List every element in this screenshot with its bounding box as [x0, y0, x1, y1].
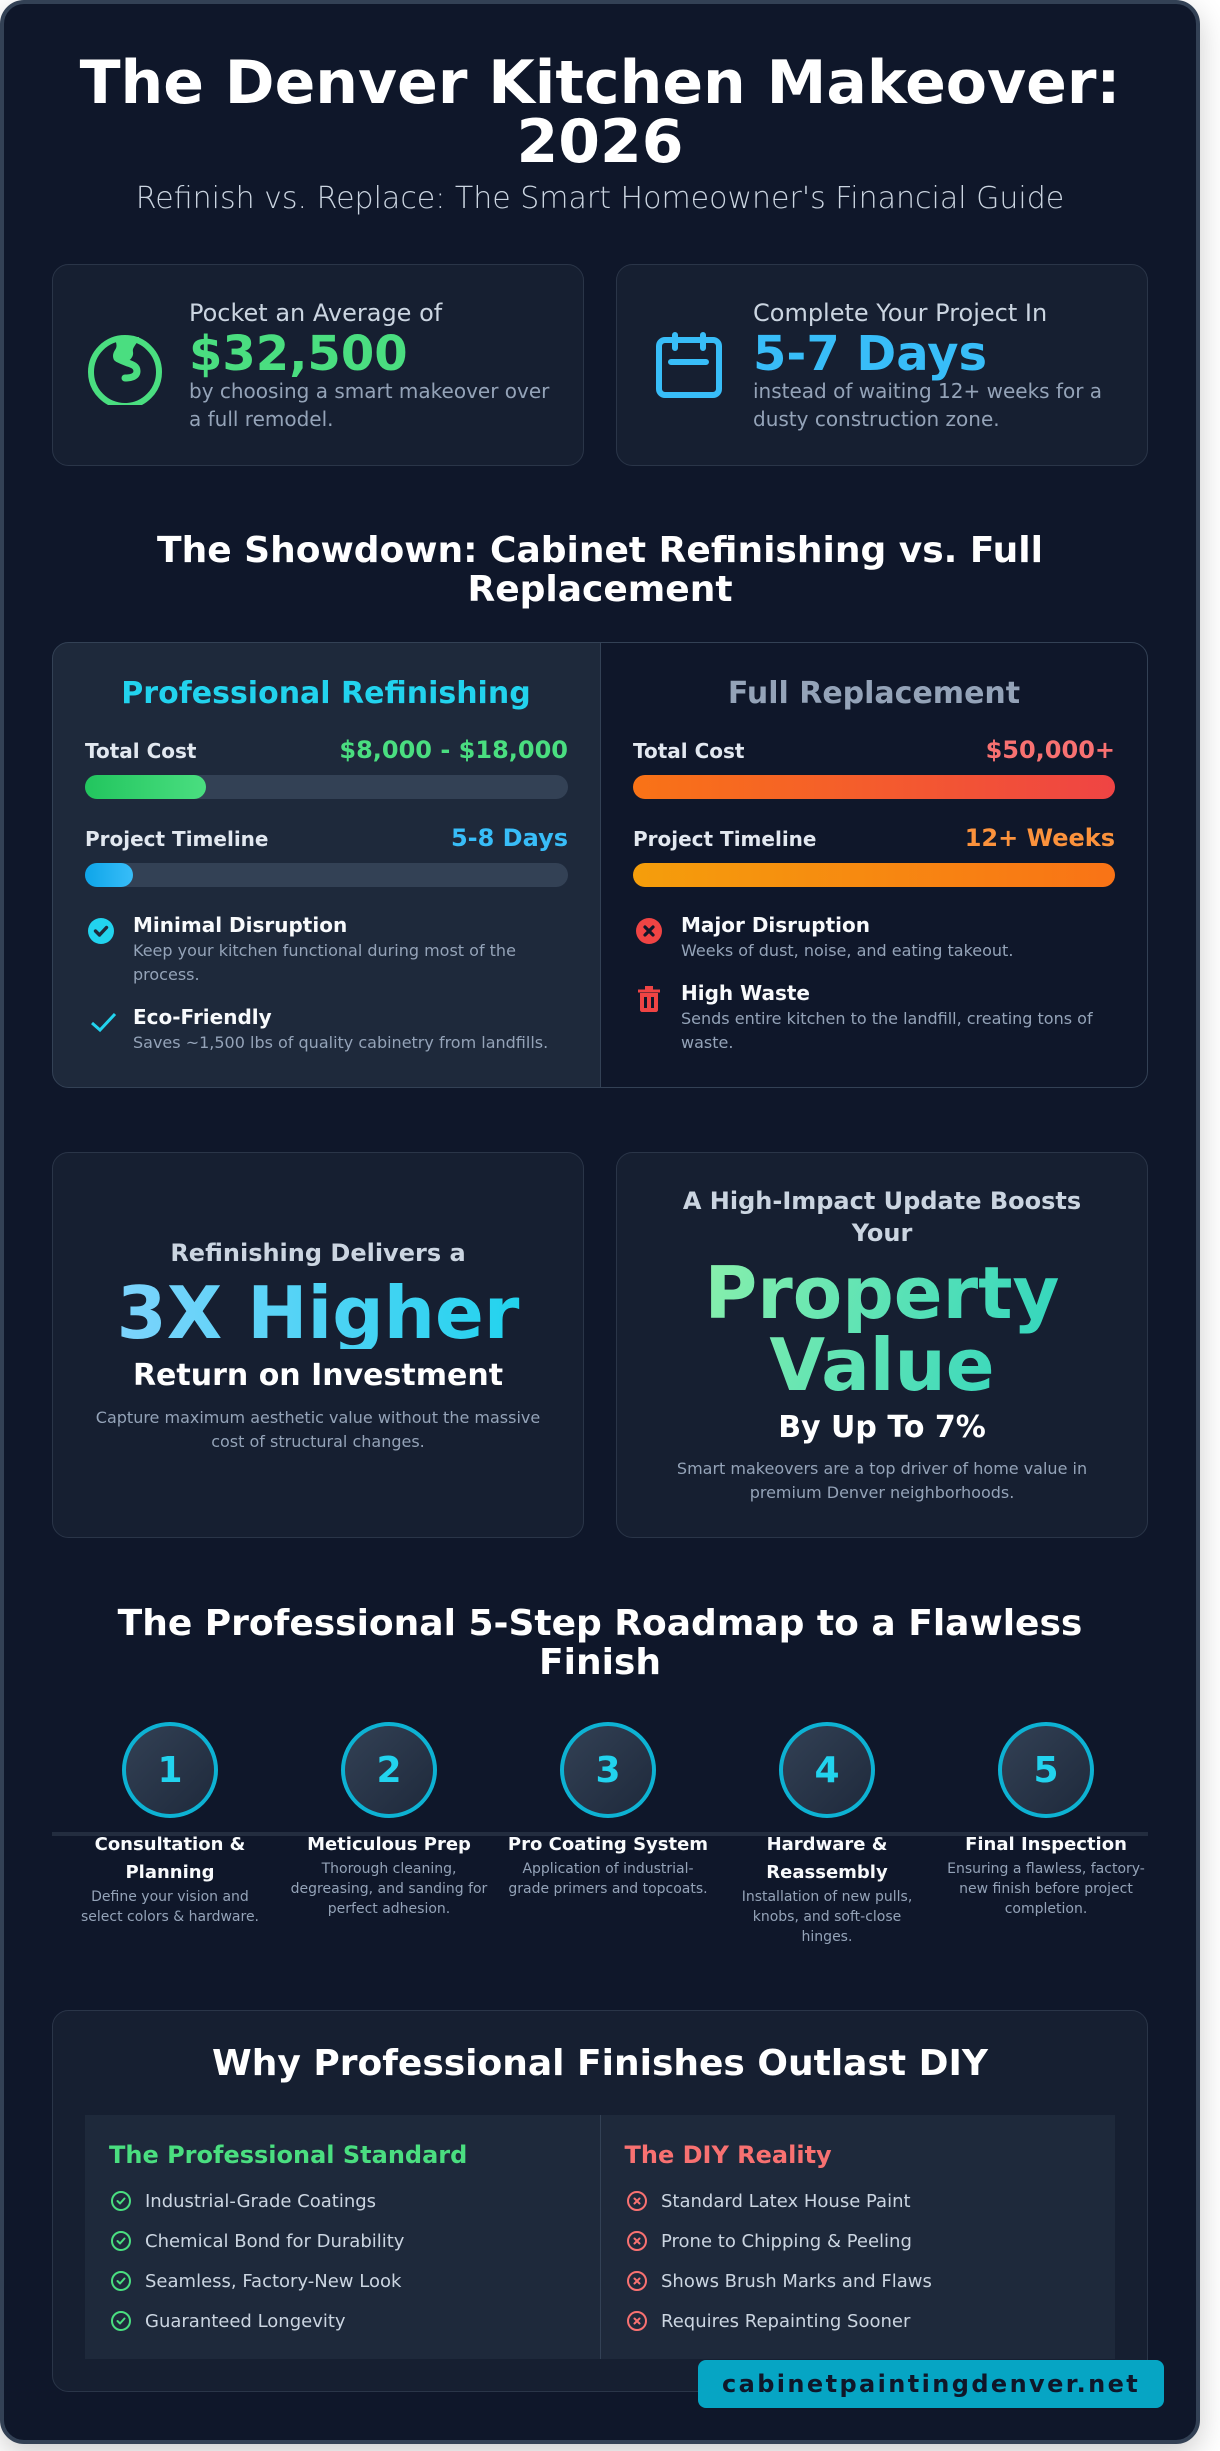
panel: property value: premium Denver neighborhoods.	[750, 1483, 1014, 1502]
column: professional refinishing: Total Cost	[85, 739, 197, 763]
column: DIY reality: The DIY Reality	[624, 2141, 832, 2169]
subtitle: Refinish vs. Replace: The Smart Homeowner's Financial Guide	[136, 181, 1064, 216]
column: professional refinishing: Saves ~1,500 lbs of quality cabinetry from landfills.	[133, 1033, 548, 1052]
step 2	[291, 1724, 488, 1917]
panel: time stat: 5-7 Days	[753, 326, 987, 382]
bar: replacement cost	[633, 775, 1115, 799]
icon list: checks	[112, 2192, 130, 2330]
heading: showdown	[157, 530, 1043, 610]
column: full replacement: waste.	[681, 1033, 733, 1052]
step 3: 3	[595, 1750, 621, 1791]
step 3: grade primers and topcoats.	[508, 1881, 708, 1897]
column: full replacement: $50,000+	[986, 736, 1115, 764]
column: professional refinishing: Project Timeline	[85, 827, 268, 851]
step 5: completion.	[1005, 1901, 1087, 1917]
panel: time stat	[616, 264, 1148, 466]
panel: time stat: dusty construction zone.	[753, 407, 1000, 431]
panel: pro vs DIY	[52, 2010, 1148, 2392]
heading: roadmap: Finish	[539, 1642, 661, 1683]
panel: ROI	[52, 1152, 584, 1538]
step 4: hinges.	[802, 1929, 852, 1945]
step 2: Meticulous Prep	[307, 1834, 471, 1855]
panel: savings stat	[52, 264, 584, 466]
icon: check badge	[88, 918, 114, 944]
step 2: perfect adhesion.	[328, 1901, 450, 1917]
panel: property value: Smart makeovers are a top driver of home value in	[677, 1459, 1087, 1478]
column: DIY reality	[624, 2141, 932, 2332]
step 3: Application of industrial-	[522, 1861, 694, 1877]
column: professional refinishing: process.	[133, 965, 200, 984]
icon: trash	[638, 986, 660, 1012]
panel: savings stat: $32,500	[189, 326, 408, 382]
step 1: Define your vision and	[91, 1889, 249, 1905]
step 5: Final Inspection	[965, 1834, 1127, 1855]
step 3	[508, 1724, 708, 1897]
step 1: 1	[157, 1750, 183, 1791]
icon: dollar coin	[91, 337, 159, 406]
title: The Denver Kitchen Makeover:	[80, 48, 1120, 118]
icon list: crosses	[628, 2192, 646, 2330]
column: professional standard: Industrial-Grade Coatings	[145, 2191, 376, 2212]
panel: ROI: Capture maximum aesthetic value without the massive	[96, 1408, 540, 1427]
step 1: Planning	[125, 1862, 215, 1883]
title: 2026	[516, 107, 684, 177]
icon: x badge	[636, 918, 662, 944]
step 5: 5	[1033, 1750, 1059, 1791]
panel: property value: Your	[851, 1219, 912, 1247]
bar: refinishing timeline	[85, 863, 568, 887]
panel: savings stat: by choosing a smart makeover over	[189, 379, 550, 403]
icon: check mark	[92, 1014, 115, 1030]
step 2: 2	[376, 1750, 402, 1791]
column: professional refinishing: Keep your kitchen functional during most of the	[133, 941, 516, 960]
column: professional standard: Guaranteed Longevity	[145, 2311, 346, 2332]
heading: showdown: The Showdown: Cabinet Refinishing vs. Full	[157, 530, 1043, 571]
step 1: select colors & hardware.	[81, 1909, 259, 1925]
roadmap	[52, 1724, 1148, 1945]
step 1	[81, 1724, 259, 1925]
column: professional refinishing: Minimal Disruption	[133, 913, 347, 937]
step 4: 4	[814, 1750, 840, 1791]
column: professional refinishing: $8,000 - $18,000	[339, 736, 568, 764]
panel: savings stat: a full remodel.	[189, 407, 334, 431]
column: professional refinishing	[85, 676, 568, 1052]
badge: website	[698, 2360, 1164, 2408]
column: full replacement	[633, 676, 1115, 1052]
icon: calendar	[659, 335, 719, 395]
step 5: new finish before project	[959, 1881, 1133, 1897]
column: professional refinishing: Professional Refinishing	[121, 676, 531, 711]
heading: showdown: Replacement	[467, 569, 733, 610]
bar: refinishing cost	[85, 775, 568, 799]
step 2: degreasing, and sanding for	[291, 1881, 488, 1897]
column: DIY reality: Requires Repainting Sooner	[661, 2311, 911, 2332]
column: full replacement: Total Cost	[633, 739, 745, 763]
step 3: Pro Coating System	[508, 1834, 708, 1855]
panel: property value	[616, 1152, 1148, 1538]
big text: property value: Value	[769, 1323, 995, 1407]
title	[80, 48, 1120, 177]
column: professional standard: Chemical Bond for Durability	[145, 2231, 405, 2252]
column: full replacement: Weeks of dust, noise, and eating takeout.	[681, 941, 1013, 960]
panel: comparison	[52, 642, 1148, 1088]
column: professional standard	[109, 2141, 467, 2332]
column: professional standard: Seamless, Factory-New Look	[145, 2271, 402, 2292]
column: full replacement: High Waste	[681, 981, 810, 1005]
column: professional standard: The Professional Standard	[109, 2141, 467, 2169]
big text: property value	[705, 1251, 1059, 1407]
step 4: Reassembly	[766, 1862, 888, 1883]
panel: ROI: Return on Investment	[133, 1358, 503, 1393]
step 4	[742, 1724, 912, 1945]
heading: roadmap: The Professional 5-Step Roadmap to a Flawless	[118, 1603, 1082, 1644]
big number: 3X higher: 3X Higher	[117, 1271, 520, 1355]
column: full replacement: Sends entire kitchen to the landfill, creating tons of	[681, 1009, 1093, 1028]
column: professional refinishing: Eco-Friendly	[133, 1005, 272, 1029]
column: full replacement: Full Replacement	[728, 676, 1020, 711]
panel: pro vs DIY: Why Professional Finishes Outlast DIY	[212, 2043, 989, 2084]
step 1: Consultation &	[95, 1834, 245, 1855]
badge: website: cabinetpaintingdenver.net	[722, 2370, 1140, 2398]
panel: savings stat: Pocket an Average of	[189, 299, 443, 327]
step 4: knobs, and soft-close	[753, 1909, 901, 1925]
step 5: Ensuring a flawless, factory-	[947, 1861, 1145, 1877]
column: full replacement: Project Timeline	[633, 827, 816, 851]
panel: property value: By Up To 7%	[778, 1410, 986, 1445]
column: professional refinishing: 5-8 Days	[451, 824, 568, 852]
column: DIY reality: Shows Brush Marks and Flaws	[661, 2271, 932, 2292]
panel: ROI: Refinishing Delivers a	[170, 1239, 466, 1267]
panel: time stat: instead of waiting 12+ weeks for a	[753, 379, 1102, 403]
column: DIY reality: Standard Latex House Paint	[661, 2191, 911, 2212]
panel: property value: A High-Impact Update Boosts	[683, 1187, 1081, 1215]
column: DIY reality: Prone to Chipping & Peeling	[661, 2231, 912, 2252]
bar: replacement timeline	[633, 863, 1115, 887]
step 4: Hardware &	[767, 1834, 887, 1855]
step 2: Thorough cleaning,	[321, 1861, 456, 1877]
panel: time stat: Complete Your Project In	[753, 299, 1047, 327]
panel: ROI: cost of structural changes.	[211, 1432, 425, 1451]
step 4: Installation of new pulls,	[742, 1889, 912, 1905]
big text: property value: Property	[705, 1251, 1059, 1335]
heading: roadmap	[118, 1603, 1082, 1683]
column: full replacement: 12+ Weeks	[965, 824, 1115, 852]
column: full replacement: Major Disruption	[681, 913, 870, 937]
step 5	[947, 1724, 1145, 1917]
